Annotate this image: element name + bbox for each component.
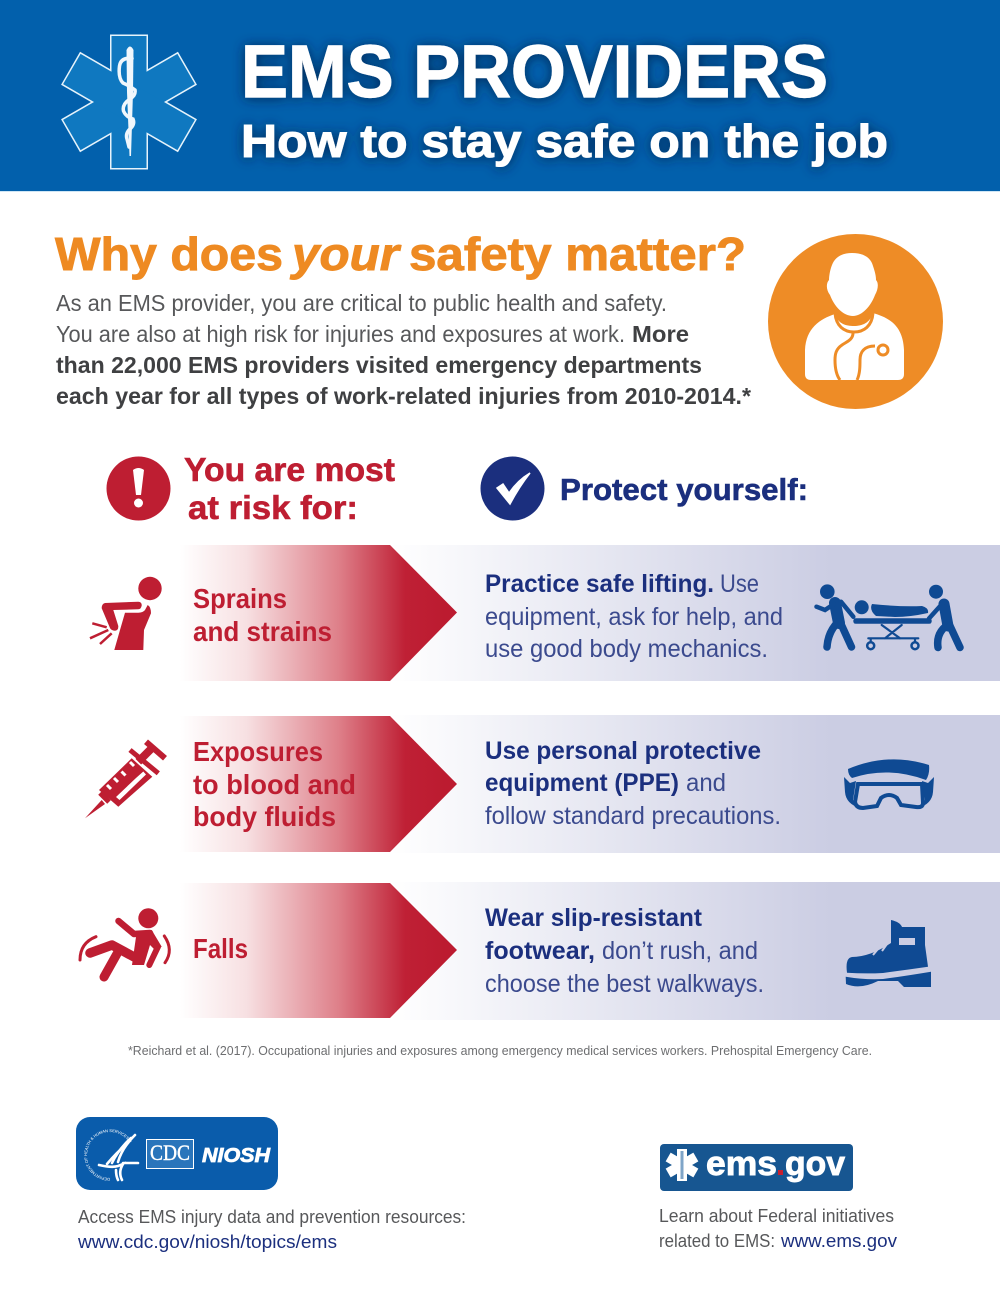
- icon: small star of life: [666, 1149, 698, 1181]
- resource text: ems.gov: related to EMS:: [659, 1231, 775, 1251]
- resource text: CDC: www.cdc.gov/niosh/topics/ems: [77, 1232, 337, 1252]
- protection text: don’t rush, and: [602, 937, 758, 965]
- resource text: CDC: Access EMS injury data and prevention resources:: [78, 1207, 466, 1227]
- protection text: Practice safe lifting.: [485, 570, 714, 598]
- intro text block: As an EMS provider, you are critical to public health and safety.: [56, 290, 667, 316]
- resource text: ems.gov: www.ems.gov: [780, 1231, 897, 1251]
- icon: exclamation mark: [106, 456, 170, 520]
- protection text: equipment, ask for help, and: [485, 603, 783, 631]
- icon: syringe: [85, 742, 165, 818]
- protection text: [485, 737, 781, 830]
- resource text: ems.gov: [659, 1206, 897, 1251]
- logo: ems.gov: gov: [785, 1145, 845, 1183]
- risk label: body fluids: [193, 801, 336, 832]
- icon: two people lifting a stretcher: [816, 584, 960, 649]
- logo: ems.gov: [660, 1144, 853, 1191]
- column heading: protect yourself: Protect yourself:: [560, 472, 808, 507]
- title: EMS PROVIDERS: [241, 30, 828, 113]
- protection text: choose the best walkways.: [485, 970, 764, 998]
- icon: safety goggles: [844, 759, 934, 808]
- intro text block: [56, 290, 751, 409]
- icon: star of life: [63, 36, 195, 168]
- protection text: follow standard precautions.: [485, 802, 781, 830]
- logo: HHS, CDC, NIOSH: [76, 1117, 278, 1190]
- footnote: *Reichard et al. (2017). Occupational injuries and exposures among emergency medical services workers. Prehospital Emergency Care.: [128, 1044, 872, 1058]
- column heading: protect yourself: [480, 456, 808, 520]
- panel: exposures to blood and body fluids row: [85, 715, 1000, 853]
- heading: why does your safety matter: Why does: [55, 228, 283, 280]
- risk label: [193, 736, 356, 832]
- intro text block: each year for all types of work-related injuries from 2010-2014.*: [56, 383, 751, 409]
- intro text block: than 22,000 EMS providers visited emergency departments: [56, 352, 702, 378]
- protection text: [485, 904, 764, 998]
- intro text block: More: [632, 321, 689, 347]
- heading: why does your safety matter: [55, 228, 746, 280]
- icon: check mark: [480, 456, 544, 520]
- protection text: Wear slip-resistant: [485, 904, 703, 932]
- logo: NIOSH: NIOSH: [202, 1145, 271, 1167]
- protection text: equipment (PPE): [485, 769, 679, 797]
- icon: work boot: [846, 920, 931, 987]
- intro text block: You are also at high risk for injuries and exposures at work.: [56, 321, 625, 347]
- protection text: and: [686, 769, 726, 797]
- risk label: to blood and: [193, 769, 356, 800]
- heading: why does your safety matter: your: [290, 228, 401, 280]
- heading: why does your safety matter: safety matter?: [409, 228, 746, 280]
- icon: person with back pain: [90, 577, 162, 650]
- risk label: Sprains: [193, 583, 287, 614]
- resource text: ems.gov: Learn about Federal initiatives: [659, 1206, 894, 1226]
- protection text: Use personal protective: [485, 737, 761, 765]
- column heading: you are most at risk for: You are most: [184, 451, 395, 488]
- panel: sprains and strains row: [90, 545, 1000, 681]
- icon: falling person: [80, 908, 169, 977]
- protection text: footwear,: [485, 937, 595, 965]
- risk label: Exposures: [193, 736, 323, 767]
- logo: HHS eagle: [84, 1129, 140, 1182]
- logo: CDC: CDC: [150, 1140, 190, 1165]
- resource text: CDC: [77, 1207, 466, 1252]
- title: [241, 30, 888, 167]
- column heading: you are most at risk for: [106, 451, 395, 526]
- risk label: and strains: [193, 616, 332, 647]
- risk label: Falls: [193, 933, 248, 964]
- column heading: you are most at risk for: at risk for:: [188, 489, 358, 526]
- icon: doctor with stethoscope in orange circle: [768, 234, 943, 409]
- logo: HHS eagle: DEPARTMENT OF HEALTH & HUMAN SERVICES USA: [84, 1129, 132, 1181]
- panel: falls row: [80, 882, 1000, 1020]
- header banner: [0, 0, 1000, 192]
- risk label: [193, 583, 332, 647]
- protection text: [485, 570, 783, 663]
- logo: ems.gov: ems: [706, 1145, 777, 1183]
- protection text: use good body mechanics.: [485, 635, 768, 663]
- protection text: Use: [720, 570, 759, 598]
- title: How to stay safe on the job: [241, 115, 888, 167]
